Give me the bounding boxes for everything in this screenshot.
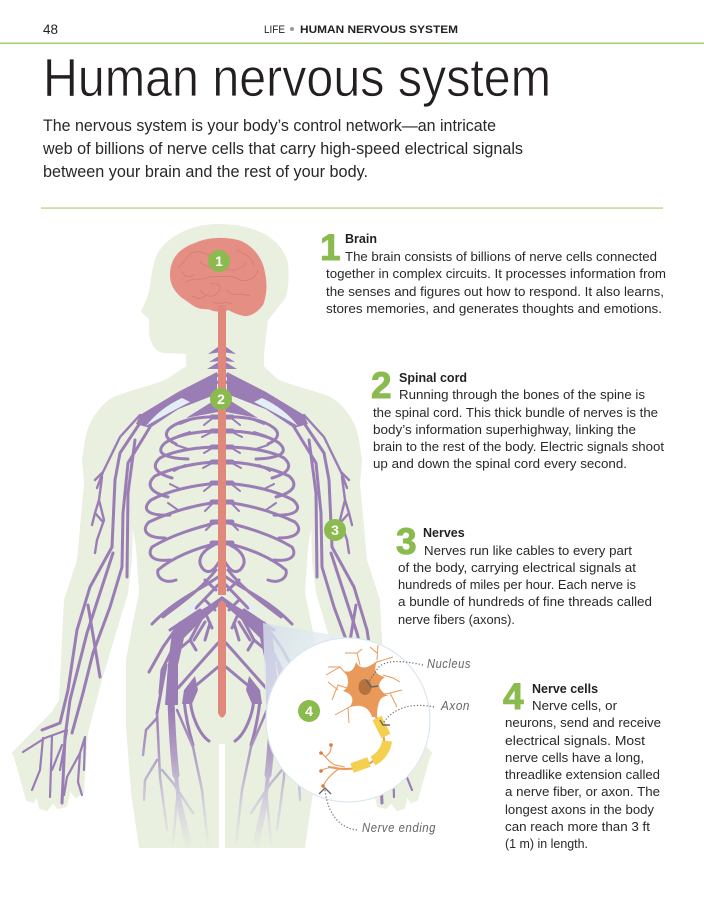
- text block 2: spinal cord: [371, 365, 664, 471]
- brain: [170, 238, 266, 316]
- page header: HUMAN NERVOUS SYSTEM: [300, 24, 458, 36]
- label: axon: Axon: [440, 699, 470, 713]
- text block 1: brain: stores memories, and generates thoughts and emotions.: [326, 301, 662, 316]
- spinal cord: [218, 305, 226, 718]
- text block 4: nerve cells: 4: [503, 676, 524, 717]
- magnified neuron: [263, 623, 471, 835]
- arm nerves: [92, 415, 140, 553]
- nerves: right side (mirror): [222, 344, 421, 846]
- shoulder branches: [160, 375, 218, 410]
- body illustration: [13, 225, 431, 847]
- text block 2: spinal cord: Spinal cord: [399, 371, 467, 385]
- text block 4: nerve cells: neurons, send and receive: [505, 715, 661, 730]
- badge 1: [208, 250, 230, 272]
- intro text: between your brain and the rest of your body.: [43, 162, 368, 181]
- badge 2: [210, 388, 232, 410]
- text block 3: nerves: nerve fibers (axons).: [398, 612, 515, 627]
- badge 2: 2: [217, 391, 225, 407]
- text block 3: nerves: 3: [396, 521, 417, 562]
- badge 3: [324, 519, 346, 541]
- neuron: [319, 645, 402, 788]
- text block 4: nerve cells: longest axons in the body: [505, 802, 655, 817]
- text block 3: nerves: hundreds of miles per hour. Each nerve is: [398, 577, 636, 592]
- page header: LIFE: [264, 24, 285, 36]
- text block 1: brain: the senses and figures out how to respond. It also learns,: [326, 284, 664, 299]
- shoulder trunk: [136, 372, 218, 428]
- body silhouette: [13, 225, 431, 847]
- neck branches: [207, 344, 222, 369]
- text block 3: nerves: [396, 521, 652, 627]
- hand: [23, 730, 85, 797]
- text block 1: brain: together in complex circuits. It processes information from: [326, 266, 666, 281]
- intro text: web of billions of nerve cells that carry high-speed electrical signals: [42, 139, 523, 158]
- text block 2: spinal cord: the spinal cord. This thick bundle of nerves is the: [373, 405, 658, 420]
- pointer lines: [319, 662, 434, 830]
- badge 1: 1: [215, 253, 223, 269]
- badge 4: [298, 700, 320, 722]
- text block 4: nerve cells: electrical signals. Most: [505, 733, 645, 748]
- text block 4: nerve cells: threadlike extension called: [505, 767, 660, 782]
- text block 4: nerve cells: can reach more than 3 ft: [505, 819, 650, 834]
- title: Human nervous system: [43, 48, 551, 108]
- text block 3: nerves: Nerves: [423, 526, 465, 540]
- rib barbs: [168, 417, 214, 530]
- trunk and pelvis blobs: [165, 596, 222, 705]
- ribs: [166, 417, 219, 444]
- text block 3: nerves: of the body, carrying electrical signals at: [398, 560, 636, 575]
- text block 1: brain: Brain: [345, 232, 377, 246]
- text block 4: nerve cells: Nerve cells: [532, 682, 598, 696]
- label: nerve ending: Nerve ending: [362, 821, 436, 835]
- leg nerves: [143, 700, 208, 846]
- intro text: The nervous system is your body’s control network—an intricate: [43, 116, 496, 135]
- badge 3: 3: [331, 522, 339, 538]
- text block 3: nerves: Nerves run like cables to every part: [424, 543, 632, 558]
- text block 1: brain: [320, 227, 666, 316]
- magnifier circle: [266, 638, 430, 802]
- text block 4: nerve cells: a nerve fiber, or axon. The: [505, 784, 660, 799]
- text block 2: spinal cord: 2: [371, 365, 392, 406]
- intro text: [42, 116, 523, 181]
- badge 4: 4: [305, 703, 313, 719]
- page header: [0, 21, 704, 44]
- label: nucleus: Nucleus: [427, 657, 471, 671]
- zoom cone: [263, 623, 350, 715]
- text block 4: nerve cells: nerve cells have a long,: [505, 750, 644, 765]
- text block 4: nerve cells: [503, 676, 661, 851]
- text block 2: spinal cord: body’s information superhighway, linking the: [373, 422, 636, 437]
- text block 2: spinal cord: brain to the rest of the body. Electric signals shoot: [373, 439, 664, 454]
- text block 1: brain: The brain consists of billions of nerve cells connected: [345, 249, 657, 264]
- text block 2: spinal cord: up and down the spinal cord every second.: [373, 456, 627, 471]
- nerves: left side: [23, 344, 222, 846]
- text block 3: nerves: a bundle of hundreds of fine threads called: [398, 594, 652, 609]
- page header: 48: [43, 21, 58, 37]
- text block 1: brain: 1: [320, 227, 341, 268]
- text block 4: nerve cells: Nerve cells, or: [532, 698, 618, 713]
- text block 2: spinal cord: Running through the bones of the spine is: [399, 387, 646, 402]
- text block 4: nerve cells: (1 m) in length.: [505, 836, 588, 851]
- pelvis nerves: [149, 570, 218, 745]
